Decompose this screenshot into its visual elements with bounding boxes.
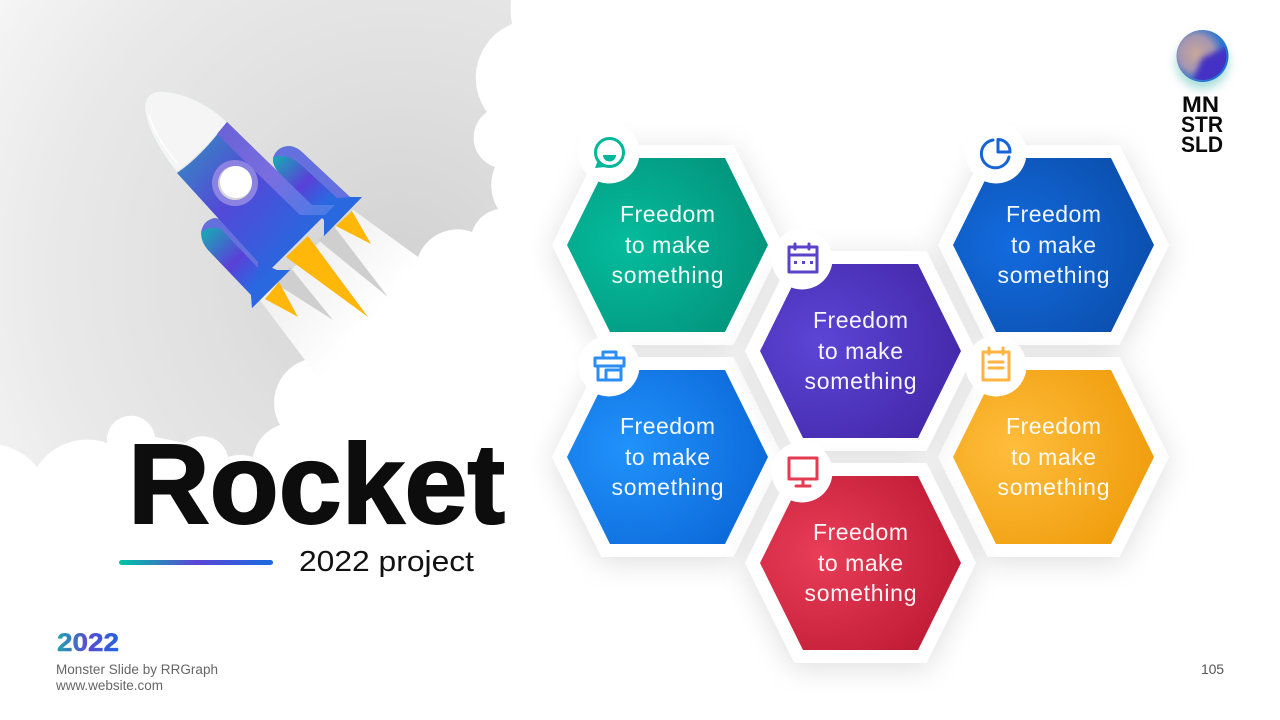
hexagon: orange: something <box>998 474 1110 500</box>
title: Rocket <box>128 421 505 547</box>
flames <box>265 211 371 317</box>
hexagon: orange: Freedom <box>1006 413 1101 439</box>
logo wordmark: SLD <box>1181 132 1223 157</box>
icon: gift box <box>578 336 640 396</box>
rocket illustration <box>145 91 388 320</box>
logo orb <box>1176 30 1232 86</box>
hexagon: purple: Freedom <box>813 307 908 333</box>
hexagon: green: to make <box>625 232 710 258</box>
footer credit <box>55 662 218 693</box>
hexagon: blue: something <box>998 262 1110 288</box>
icon: chat bubble <box>578 122 640 184</box>
hexagon: green: Freedom <box>620 201 715 227</box>
hexagon: purple <box>745 251 976 451</box>
nose cone <box>145 91 227 172</box>
hexagon cards <box>552 145 1169 663</box>
hexagon: blue <box>938 145 1169 345</box>
icon: pie chart <box>966 122 1026 184</box>
page number: 105 <box>1201 661 1224 677</box>
hexagon: blue: Freedom <box>1006 201 1101 227</box>
left booster <box>201 218 290 308</box>
accent line <box>119 560 273 565</box>
icon: notepad <box>966 336 1026 396</box>
hexagon: orange <box>938 357 1169 557</box>
hexagon: green <box>552 145 783 345</box>
hexagon: red: Freedom <box>813 519 908 545</box>
hexagon: sky blue: Freedom <box>620 413 715 439</box>
porthole window <box>212 160 258 206</box>
logo <box>1176 30 1232 157</box>
logo wordmark: MN <box>1182 92 1219 117</box>
hexagon: red: to make <box>818 550 903 576</box>
footer credit: www.website.com <box>55 678 163 693</box>
logo wordmark: STR <box>1181 112 1223 137</box>
hexagon: blue: to make <box>1011 232 1096 258</box>
hexagon: green: something <box>612 262 724 288</box>
logo wordmark <box>1181 92 1223 157</box>
hexagon: sky blue: something <box>612 474 724 500</box>
hexagon: sky blue: to make <box>625 444 710 470</box>
exhaust shadows <box>275 225 388 320</box>
right booster <box>273 146 362 236</box>
icon: monitor <box>772 442 832 502</box>
hexagon: purple: something <box>804 368 916 394</box>
cloud background <box>0 0 512 467</box>
rocket body <box>177 122 335 283</box>
hexagon: red: something <box>804 580 916 606</box>
subtitle: 2022 project <box>299 546 474 578</box>
hexagon: orange: to make <box>1011 444 1096 470</box>
footer year: 2022 <box>57 629 119 657</box>
hexagon: sky blue <box>552 357 783 557</box>
footer credit: Monster Slide by RRGraph <box>56 662 218 677</box>
hexagon: purple: to make <box>818 338 903 364</box>
icon: calendar <box>772 228 832 290</box>
hexagon: red <box>745 463 976 663</box>
